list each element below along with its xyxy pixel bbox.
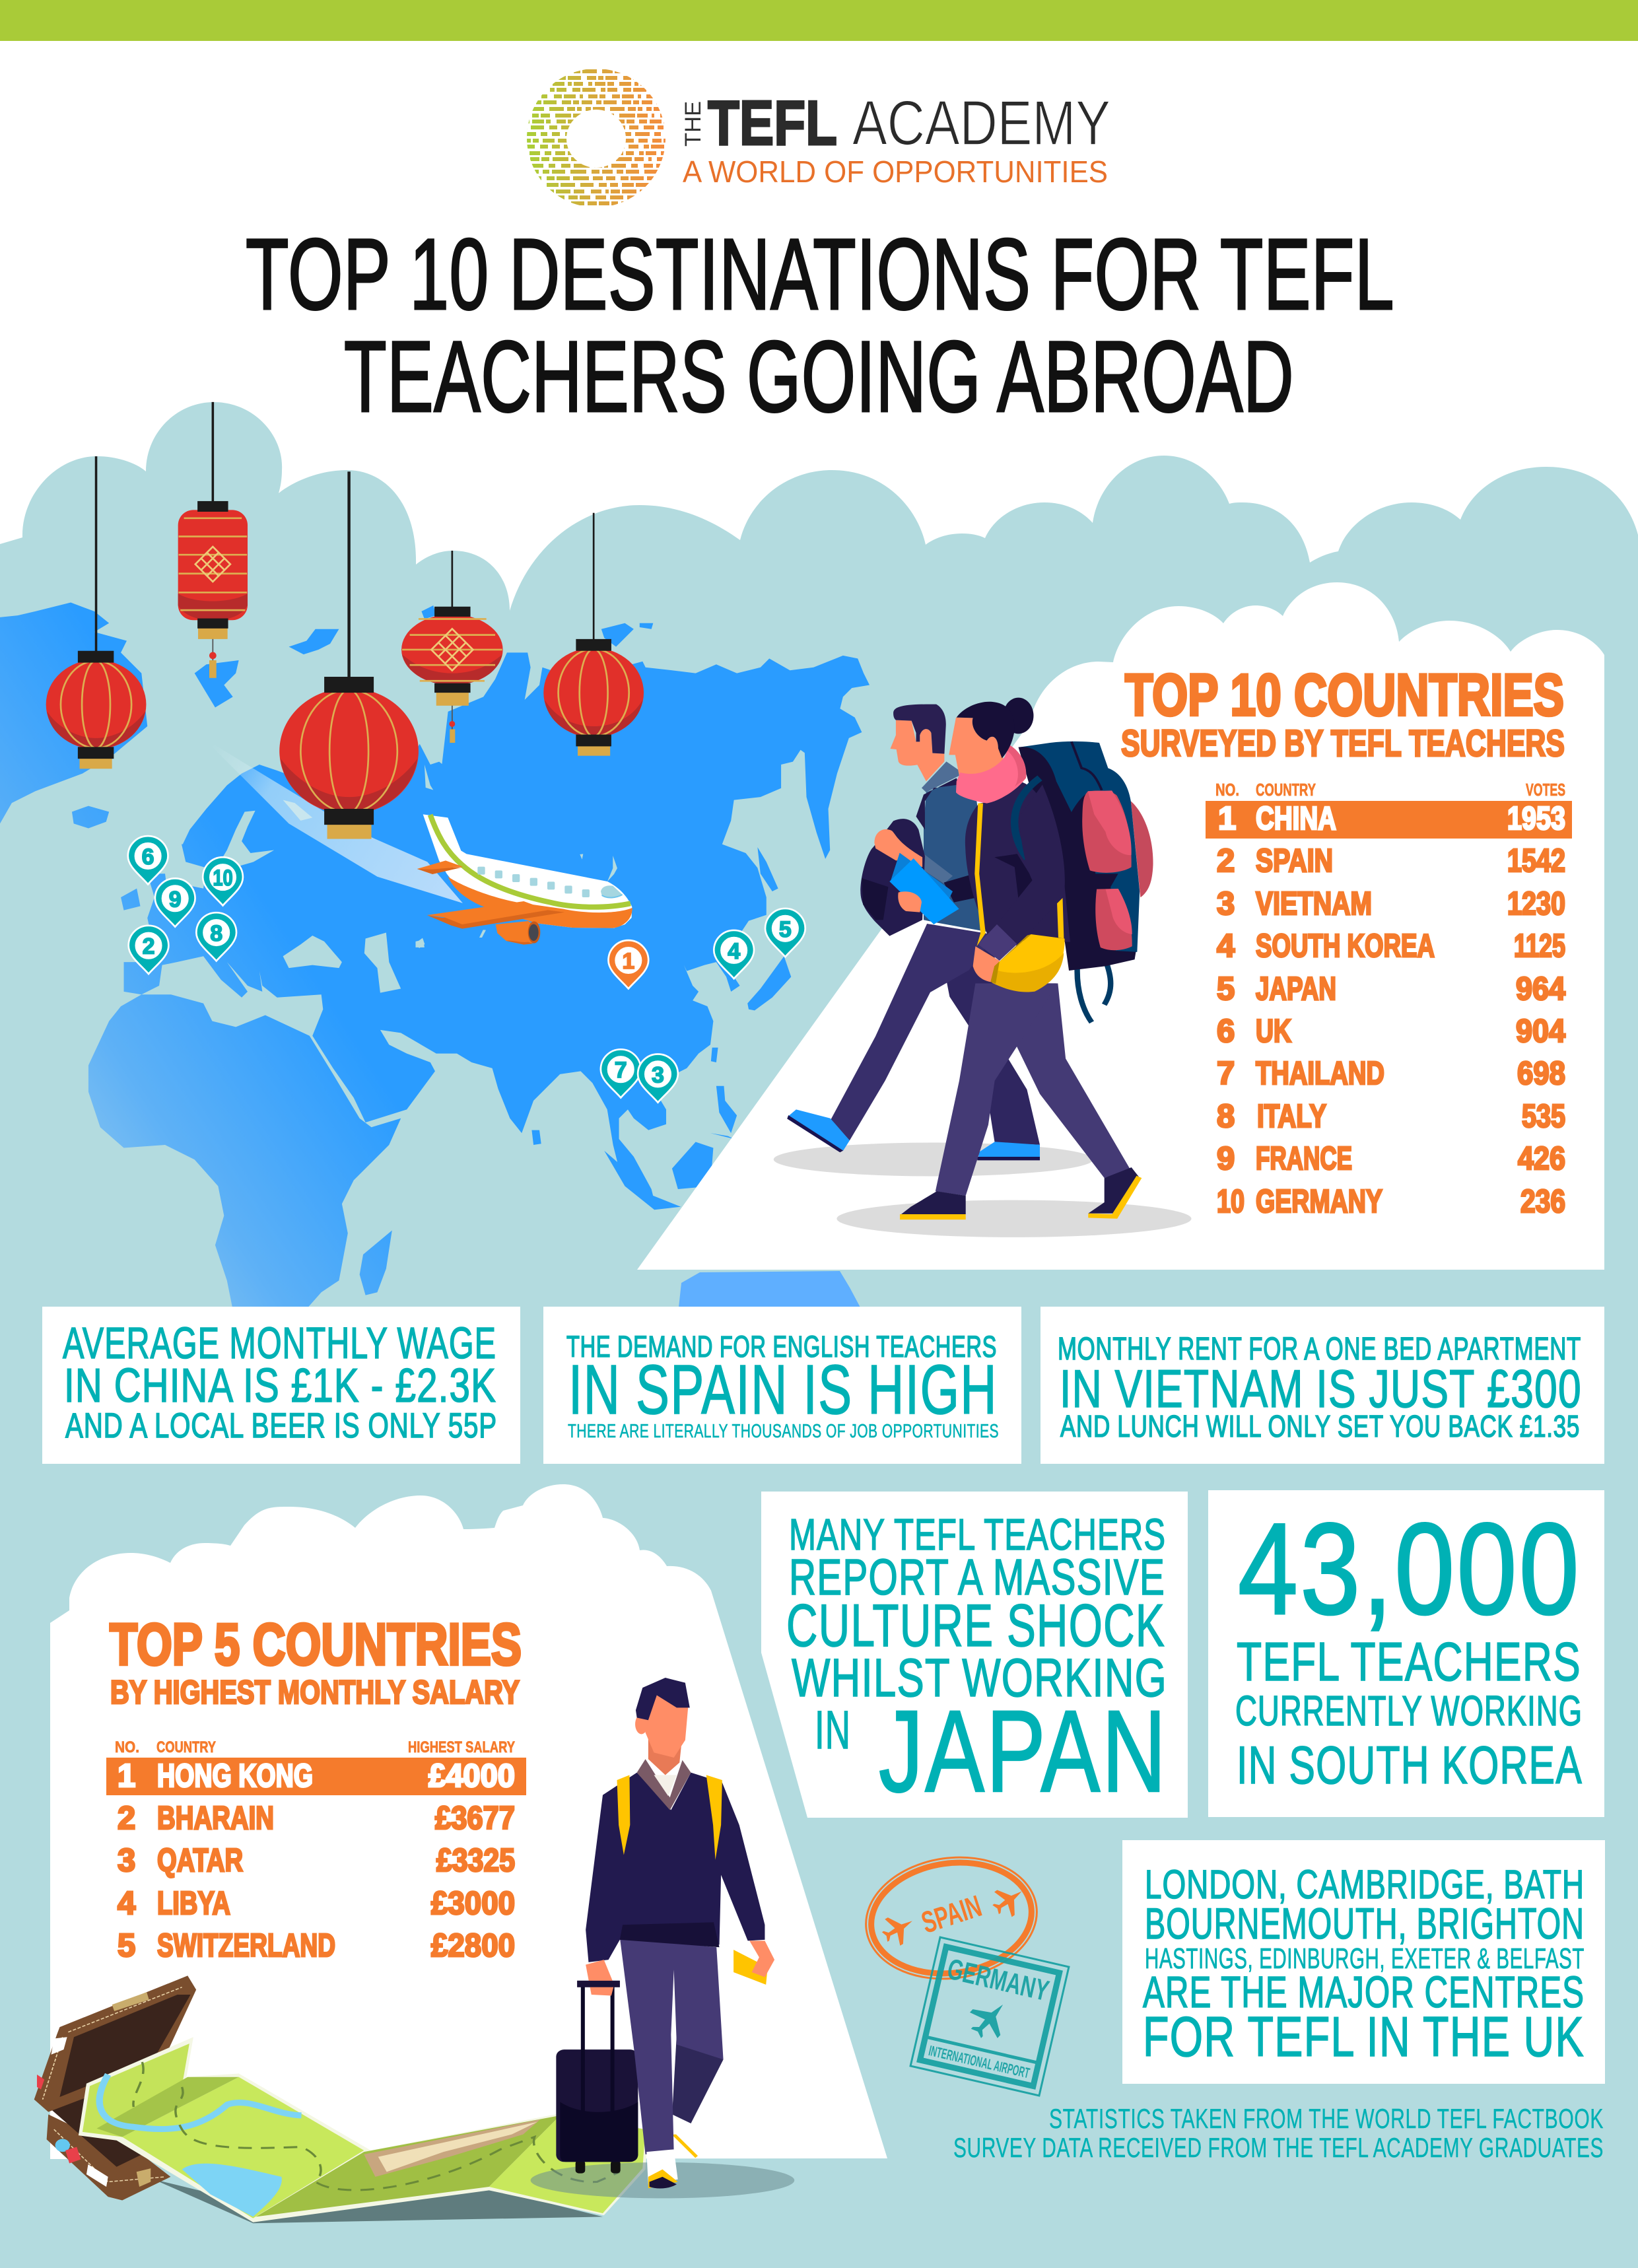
pin 3: 3 — [652, 1062, 664, 1087]
rows 2 to 10: 426 — [1518, 1141, 1565, 1177]
salary rows 2 to 5: £3677 — [435, 1801, 515, 1836]
logo globe — [522, 71, 673, 203]
rows 2 to 10: 7 — [1217, 1056, 1235, 1091]
pin 5 — [765, 909, 805, 957]
salary rows 2 to 5 — [118, 1801, 515, 1964]
pin 10 — [203, 857, 243, 905]
lantern 4 — [401, 551, 503, 743]
rows 2 to 10: ITALY — [1257, 1099, 1326, 1134]
Greenland and northern islands — [0, 603, 147, 823]
lanterns — [46, 402, 644, 839]
salary rows 2 to 5: 2 — [118, 1801, 135, 1836]
fact box: Spain demand: THERE ARE LITERALLY THOUSANDS OF JOB OPPORTUNITIES — [568, 1421, 999, 1442]
rows 2 to 10: VIETNAM — [1256, 886, 1372, 922]
rows 2 to 10: 6 — [1217, 1014, 1235, 1049]
highlight row Hong Kong: HONG KONG — [157, 1758, 313, 1794]
flight trail — [231, 758, 463, 903]
logo: The TEFL Academy: A WORLD OF OPPORTUNITIES — [683, 155, 1108, 189]
rows 2 to 10: 1125 — [1514, 928, 1565, 964]
woman backpack — [1019, 741, 1153, 1022]
stamp: Spain — [858, 1847, 1044, 1989]
world map — [0, 603, 870, 1307]
rows 2 to 10 — [1217, 843, 1565, 1220]
heading: top 5 countries: TOP 5 COUNTRIES — [110, 1611, 522, 1677]
title — [246, 218, 1394, 433]
torso and arms — [586, 1773, 765, 1962]
rows 2 to 10: SPAIN — [1256, 843, 1333, 879]
woman upper body — [949, 698, 1070, 992]
man legs — [787, 924, 1040, 1160]
fact box: Japan culture shock: CULTURE SHOCK — [786, 1593, 1165, 1659]
Australia — [679, 1271, 860, 1307]
salary rows 2 to 5: 5 — [118, 1928, 135, 1964]
stamp: Germany — [910, 1937, 1069, 2096]
pin 4: 4 — [728, 939, 740, 964]
pin 3 — [638, 1054, 678, 1103]
fact box: Japan culture shock: IN — [815, 1700, 851, 1760]
illustration: couple of backpackers — [774, 698, 1192, 1237]
pin 6: 6 — [142, 844, 154, 870]
fact box: South Korea 43,000 — [1208, 1490, 1604, 1817]
highlight row China: 1 — [1218, 801, 1236, 837]
pin 1: 1 — [622, 949, 634, 974]
rows 2 to 10: FRANCE — [1256, 1141, 1352, 1177]
pin 4 — [714, 930, 754, 979]
panel: top 5 countries — [50, 1484, 887, 2159]
fact box: Japan culture shock: MANY TEFL TEACHERS — [789, 1510, 1166, 1560]
highlight row China: CHINA — [1256, 801, 1336, 837]
salary rows 2 to 5: £2800 — [431, 1928, 515, 1964]
stamp: Germany: GERMANY — [944, 1953, 1052, 2007]
fact box: Spain demand: IN SPAIN IS HIGH — [568, 1351, 998, 1429]
location pins — [128, 836, 805, 1103]
rows 2 to 10: 964 — [1516, 971, 1565, 1007]
lantern 3 — [279, 471, 419, 839]
fact box: China wage: IN CHINA IS £1K - £2.3K — [64, 1359, 496, 1412]
heading: top 5 countries: BY HIGHEST MONTHLY SALARY — [110, 1674, 520, 1711]
footer: sources — [953, 2103, 1604, 2163]
pin 9 — [155, 878, 195, 927]
traveller shadow — [531, 2162, 794, 2198]
pin 2 — [129, 926, 168, 974]
salary table header: HIGHEST SALARY — [408, 1738, 515, 1756]
pin 1 — [608, 940, 648, 988]
pin 2: 2 — [143, 934, 154, 959]
fact box: Spain demand: THE DEMAND FOR ENGLISH TEACHERS — [566, 1330, 997, 1363]
logo: The TEFL Academy — [522, 71, 1110, 203]
folded map — [79, 2037, 648, 2222]
rows 2 to 10: THAILAND — [1256, 1056, 1384, 1091]
highlight row China — [1206, 801, 1572, 839]
pin 7 — [601, 1049, 641, 1098]
salary rows 2 to 5: SWITZERLAND — [157, 1928, 335, 1964]
Africa — [88, 994, 401, 1307]
table header — [1215, 780, 1565, 800]
pin 6 — [128, 836, 168, 884]
table header: NO. — [1215, 780, 1239, 800]
heading: top 10 countries — [1121, 662, 1565, 765]
fact box: China wage: AVERAGE MONTHLY WAGE — [63, 1319, 496, 1368]
fact box: Vietnam rent — [1041, 1307, 1604, 1464]
logo: The TEFL Academy: ACADEMY — [852, 88, 1110, 158]
rows 2 to 10: 8 — [1217, 1099, 1235, 1134]
salary table header: NO. — [115, 1738, 139, 1756]
logo: The TEFL Academy: TEFL — [708, 88, 837, 158]
lantern 1 — [46, 456, 146, 769]
suitcase — [34, 1976, 196, 2200]
UK and Ireland — [121, 874, 166, 918]
salary rows 2 to 5: 4 — [118, 1886, 135, 1921]
pin 5: 5 — [779, 917, 792, 942]
salary table header — [115, 1738, 515, 1756]
top green bar — [0, 0, 1638, 41]
rows 2 to 10: 698 — [1517, 1056, 1565, 1091]
legs and shoes — [674, 2135, 697, 2157]
table: top 5 countries — [106, 1738, 526, 1964]
pin 7: 7 — [615, 1058, 627, 1083]
rows 2 to 10: JAPAN — [1256, 971, 1336, 1007]
highlight row Hong Kong: 1 — [118, 1758, 135, 1794]
illustration: traveller with suitcase — [531, 1678, 794, 2198]
pin 10: 10 — [213, 866, 233, 891]
woman legs — [900, 983, 1142, 1220]
hands and ticket — [586, 1960, 614, 1996]
rows 2 to 10: 1230 — [1507, 886, 1565, 922]
lantern 2 — [178, 402, 248, 678]
fact box: Spain demand — [543, 1307, 1021, 1464]
rows 2 to 10: 4 — [1217, 928, 1235, 964]
highlight row Hong Kong: £4000 — [428, 1758, 515, 1794]
rows 2 to 10: 535 — [1522, 1099, 1565, 1134]
fact box: Japan culture shock: WHILST WORKING — [792, 1648, 1167, 1708]
highlight row Hong Kong — [106, 1758, 526, 1795]
stamp: Spain: SPAIN — [917, 1888, 986, 1940]
rows 2 to 10: 10 — [1217, 1184, 1245, 1220]
rows 2 to 10: 2 — [1217, 843, 1235, 879]
ground shadows — [774, 1143, 1192, 1237]
inland seas — [218, 765, 433, 993]
Madagascar — [360, 1230, 392, 1295]
salary rows 2 to 5: £3000 — [431, 1886, 515, 1921]
fact box: Japan culture shock: REPORT A MASSIVE — [789, 1549, 1165, 1606]
salary table header: COUNTRY — [156, 1738, 216, 1756]
stamp: Germany: INTERNATIONAL AIRPORT — [927, 2042, 1031, 2081]
fact box: China wage — [42, 1307, 520, 1464]
fact box: Japan culture shock: JAPAN — [879, 1687, 1168, 1816]
East Asian islands — [711, 847, 791, 1133]
salary rows 2 to 5: QATAR — [157, 1843, 243, 1878]
fact box: Japan culture shock — [761, 1492, 1188, 1818]
airplane — [415, 814, 632, 948]
salary rows 2 to 5: 3 — [118, 1843, 135, 1878]
highlight row China: 1953 — [1507, 801, 1565, 837]
pin 9: 9 — [169, 887, 182, 912]
table header: VOTES — [1526, 780, 1565, 800]
pin 8 — [196, 912, 236, 961]
fact box: China wage: AND A LOCAL BEER IS ONLY 55P — [65, 1406, 497, 1445]
rows 2 to 10: GERMANY — [1256, 1184, 1382, 1220]
rows 2 to 10: 904 — [1516, 1014, 1565, 1049]
illustration: open suitcase and map — [34, 1976, 648, 2223]
rolling suitcase — [556, 1981, 638, 2174]
rows 2 to 10: 3 — [1217, 886, 1235, 922]
map shadow — [154, 2180, 603, 2223]
pin 8: 8 — [210, 921, 222, 946]
salary rows 2 to 5: LIBYA — [157, 1886, 230, 1921]
salary rows 2 to 5: BHARAIN — [157, 1801, 274, 1836]
rows 2 to 10: 1542 — [1507, 843, 1565, 879]
table header: COUNTRY — [1256, 780, 1316, 800]
man upper body — [860, 704, 994, 936]
rows 2 to 10: 5 — [1217, 971, 1235, 1007]
rows 2 to 10: UK — [1256, 1014, 1291, 1049]
fact box: UK centres — [1122, 1840, 1605, 2084]
table: top 10 countries — [1206, 780, 1572, 1220]
head — [648, 1735, 683, 1775]
lantern 5 — [543, 513, 644, 756]
rows 2 to 10: 236 — [1520, 1184, 1565, 1220]
rows 2 to 10: SOUTH KOREA — [1256, 928, 1435, 964]
Eurasia — [0, 603, 870, 1307]
rows 2 to 10: 9 — [1217, 1141, 1235, 1177]
heading: top 5 countries — [110, 1611, 522, 1711]
logo wordmark: THE — [681, 101, 706, 147]
salary rows 2 to 5: £3325 — [436, 1843, 515, 1878]
panel: top 10 countries — [637, 582, 1604, 1270]
